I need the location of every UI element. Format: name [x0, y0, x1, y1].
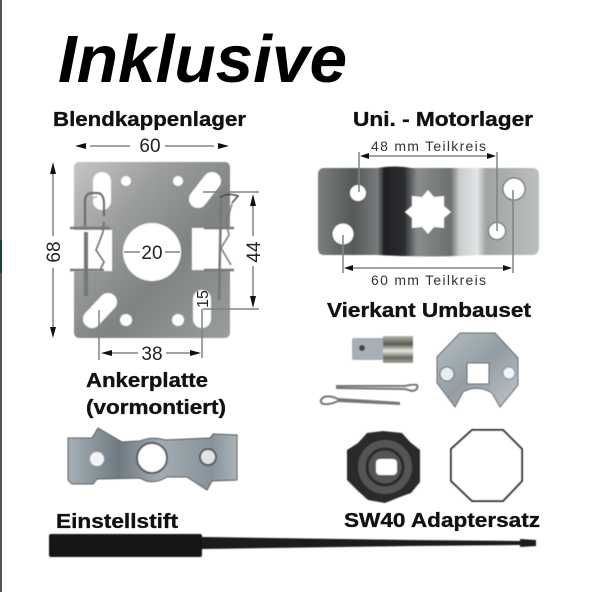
dimension labels: 15 — [195, 290, 212, 308]
heading: Ankerplatte vormontiert: Ankerplatte — [86, 369, 208, 392]
plate body — [318, 166, 539, 256]
part: octagonal plate — [437, 333, 518, 407]
diagram: Uni motor bearing — [318, 138, 539, 288]
part: plate holes — [440, 367, 515, 381]
dimension labels: 60 mm Teilkreis — [371, 272, 486, 288]
dimension labels: 48 mm Teilkreis — [371, 138, 486, 154]
part: anchor plate — [68, 428, 237, 490]
part: octagonal ring — [451, 430, 522, 501]
spring clips — [70, 193, 238, 300]
heading: SW40 Adaptersatz: SW40 Adaptersatz — [344, 509, 540, 532]
dimension labels — [44, 136, 265, 365]
dimension arrows — [344, 153, 512, 271]
part: square adapter — [352, 336, 413, 363]
plate body — [72, 162, 232, 338]
dimension labels: 68 — [44, 241, 65, 263]
heading: Ankerplatte vormontiert: (vormontiert) — [86, 396, 226, 419]
heading: Einstellstift: Einstellstift — [56, 510, 178, 533]
part: black adapter — [347, 431, 420, 503]
dimension lines — [343, 152, 513, 273]
heading: Ankerplatte vormontiert — [86, 369, 226, 419]
part: cotter pins — [321, 385, 417, 404]
dimension labels: 38 — [141, 344, 163, 365]
dimension labels: 44 — [244, 241, 265, 263]
heading: Uni. - Motorlager: Uni. - Motorlager — [353, 108, 533, 131]
left page edge strip — [0, 0, 2, 592]
dimension labels: 20 — [141, 243, 163, 264]
part: adjusting pin — [49, 534, 536, 557]
title: Inklusive — [58, 22, 347, 97]
dimension labels: 60 — [139, 136, 161, 157]
heading: Blendkappenlager: Blendkappenlager — [53, 108, 246, 131]
dimension labels — [371, 138, 486, 288]
heading: Vierkant Umbauset: Vierkant Umbauset — [327, 299, 531, 322]
diagram: Blendkappenlager plate — [44, 136, 265, 365]
dimension arrows — [50, 143, 256, 356]
dimension lines — [53, 146, 259, 360]
